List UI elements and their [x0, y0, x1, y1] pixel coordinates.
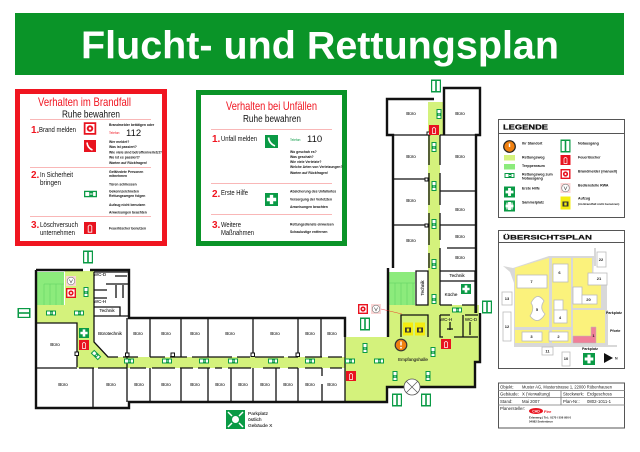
step 2: Türen schliessen	[109, 182, 137, 186]
step 3: Weitere	[221, 222, 241, 229]
legend entries left: Ihr Standort	[522, 142, 543, 146]
room labels: Büro	[225, 331, 235, 336]
room labels: Büro	[455, 111, 465, 116]
planner logo	[529, 408, 572, 424]
emergency exit doors	[18, 80, 492, 406]
step 1: Telefon:	[109, 131, 120, 135]
legend entries left: Treppenraum	[522, 164, 545, 168]
site map: 7	[530, 279, 533, 284]
room labels: Büro	[455, 207, 465, 212]
legend entries left: Erste Hilfe	[522, 186, 540, 190]
step 1: Brandmelder betätigen oder	[109, 123, 155, 127]
site map: Parkplatz	[606, 311, 622, 315]
title block: Muster AG, Musterstrasse 1, 22000 Rübenhausen	[522, 384, 613, 390]
step 2: mitnehmen	[109, 174, 127, 178]
legend entries right: Brandmelder (manuell)	[578, 170, 618, 174]
legend entries left	[504, 141, 553, 212]
site map: 5	[536, 307, 539, 312]
room labels: Büro	[327, 331, 337, 336]
site map: 12	[505, 324, 510, 329]
room labels	[50, 111, 478, 387]
room labels: Büro	[215, 382, 225, 387]
title block: Plan-Nr.:	[563, 399, 580, 404]
step 2: 2.	[212, 189, 221, 200]
step 2	[212, 189, 336, 209]
step 3: Rettungsdienste einweisen	[290, 222, 334, 226]
site map: 4	[559, 315, 562, 320]
legend entries right: Bedienstelle RWA	[578, 184, 609, 188]
step 2: Aufzug nicht benutzen	[109, 203, 145, 207]
assembly point: östlich	[248, 417, 262, 423]
site map: 3	[530, 334, 533, 339]
room labels: Büro	[190, 382, 200, 387]
title block: Mai 2007	[522, 399, 540, 404]
assembly point	[226, 410, 273, 429]
step 3: unternehmen	[40, 230, 75, 237]
step 3	[212, 220, 334, 237]
room labels: Büro	[283, 382, 293, 387]
icon: revolving door	[404, 379, 420, 395]
step 2: Anweisungen beachten	[109, 210, 147, 214]
floor plan	[18, 80, 492, 429]
room labels: Büro	[406, 198, 416, 203]
legend entries left: Rettungsweg	[522, 156, 545, 160]
step 1: Wie viele Verletzte?	[290, 160, 321, 164]
overview heading: ÜBERSICHTSPLAN	[503, 232, 592, 242]
legend heading: LEGENDE	[503, 124, 548, 132]
step 2: Versorgung der Verletzten	[290, 198, 332, 202]
site map: 21	[597, 276, 602, 281]
step 1: Warten auf Rückfragen!	[109, 161, 147, 165]
heading: Unfälle: Verhalten bei Unfällen	[226, 99, 317, 113]
room labels: Büro	[406, 111, 416, 116]
room labels: Büro	[327, 382, 337, 387]
room labels: Büro	[305, 382, 315, 387]
room labels: Büro	[133, 331, 143, 336]
step 3: Maßnahmen	[221, 230, 254, 237]
legend entries right: Feuerlöscher	[578, 156, 601, 160]
room labels: WC-H	[94, 299, 106, 304]
room labels: Büro	[455, 154, 465, 159]
subheading: Ruhe bewahren	[62, 110, 120, 120]
step 2	[31, 170, 147, 214]
escape route and stair fills	[37, 102, 479, 402]
step 3: Schaulustige entfernen	[290, 230, 328, 234]
room labels: Technik	[99, 308, 115, 313]
planner logo: Fire	[544, 409, 552, 414]
assembly point: Gebäude X	[248, 423, 273, 429]
room labels: Büro	[161, 331, 171, 336]
legend entries right: (im Brandfall nicht benutzen)	[578, 202, 619, 206]
site map: Parkplatz	[582, 347, 598, 351]
planner logo: 54082 Seelenbrun	[529, 420, 553, 424]
wall columns	[75, 132, 430, 356]
room labels: Technik	[449, 273, 465, 278]
assembly point: Parkplatz	[248, 411, 269, 417]
panel: Verhalten im Brandfall	[18, 92, 164, 244]
step 1: Warten auf Rückfragen!	[290, 171, 328, 175]
step 2: In Sicherheit	[40, 172, 73, 179]
title block	[498, 383, 625, 428]
step 1: 110	[307, 134, 322, 145]
planner logo: CAD	[532, 410, 540, 414]
step 1: Wo geschah es?	[290, 150, 317, 154]
room labels: Bürotechnik	[98, 331, 123, 336]
site map: 6	[558, 270, 561, 275]
title block: X (Verwaltung)	[522, 392, 551, 396]
room labels: Büro	[134, 382, 144, 387]
site map: 22	[599, 257, 604, 262]
title block: 0802-1011-1	[587, 399, 612, 404]
room labels: Büro	[238, 382, 248, 387]
legend entries left: Sammelplatz	[522, 200, 544, 204]
step 1: 1.	[31, 125, 40, 136]
title block: Planersteller:	[500, 406, 525, 411]
step 2: Gekennzeichneten	[109, 190, 139, 194]
site map: 20	[586, 297, 591, 302]
legend entries right: Notausgang	[578, 142, 599, 146]
step 3	[31, 220, 146, 237]
title banner: Flucht- und Rettungsplan	[81, 24, 559, 68]
step 1: Wie viele sind betroffen/verletzt?	[109, 150, 162, 154]
room labels: Küche	[445, 292, 458, 297]
subheading: Ruhe bewahren	[243, 114, 301, 125]
step 2: 2.	[31, 170, 40, 181]
site map: N	[615, 356, 618, 360]
room labels: Büro	[406, 238, 416, 243]
site map: 2	[557, 334, 560, 339]
step 3: Feuerlöscher benutzen	[109, 226, 146, 230]
outer walls	[36, 88, 480, 408]
room labels: Büro	[260, 382, 270, 387]
heading: Brandfall: Verhalten im Brandfall	[38, 95, 131, 109]
title block: Objekt:	[500, 384, 514, 390]
room labels: Büro	[161, 382, 171, 387]
step 1: Was ist passiert?	[109, 145, 137, 149]
site map: 10	[564, 356, 569, 361]
title block: Gebäude:	[500, 392, 519, 396]
room labels: Büro	[190, 331, 200, 336]
step 2: Anweisungen beachten	[290, 205, 328, 209]
panel: Übersichtsplan	[498, 230, 625, 368]
room labels: Büro	[270, 331, 280, 336]
panel: Verhalten bei Unfällen	[198, 92, 344, 244]
room labels: Büro	[455, 255, 465, 260]
step 3: 3.	[212, 220, 221, 231]
step 2: Rettungswegen folgen	[109, 194, 145, 198]
legend entries right: Aufzug	[578, 196, 590, 200]
planner logo: Erlenweg | Tel.: 0170 / 556 950 0	[529, 416, 572, 420]
site map: 13	[505, 296, 510, 301]
step 2: bringen	[40, 180, 61, 187]
room labels: Technik	[420, 280, 425, 296]
panel: Legende	[498, 120, 625, 218]
room labels: Büro	[305, 331, 315, 336]
room labels: Büro	[106, 382, 116, 387]
legend entries left: Rettungsweg zum	[522, 172, 553, 176]
title block: Stand:	[500, 399, 512, 404]
room labels: Büro	[455, 234, 465, 239]
step 1: Telefon:	[290, 138, 301, 142]
step 1	[212, 134, 343, 175]
room labels: Büro	[50, 342, 60, 347]
room labels: WC-D	[465, 317, 478, 322]
room labels: Büro	[58, 382, 68, 387]
title block: Erdgeschoss	[587, 392, 612, 396]
site map: 1	[592, 333, 595, 338]
site map	[502, 248, 622, 366]
site map: Pforte	[610, 329, 620, 333]
site map: 11	[545, 348, 550, 354]
icon: you are here	[395, 339, 407, 351]
step 1: Welche Arten von Verletzungen?	[290, 165, 343, 169]
room labels: WC-H	[440, 317, 452, 322]
step 1: 112	[126, 128, 141, 139]
title banner	[15, 13, 624, 75]
step 1: Brand melden	[39, 127, 76, 134]
step 1: Wer meldet?	[109, 140, 129, 144]
legend entries right	[560, 140, 619, 210]
room labels: Empfangshalle	[398, 357, 428, 362]
step 1: 1.	[212, 134, 221, 145]
room labels: Büro	[406, 154, 416, 159]
step 3: Löschversuch	[40, 222, 78, 229]
step 2: Gefährdete Personen	[109, 170, 143, 174]
title block: Stockwerk:	[563, 392, 584, 396]
safety icons	[66, 125, 471, 395]
room labels: WC-D	[94, 272, 107, 277]
step 3: 3.	[31, 220, 40, 231]
legend entries left: Notausgang	[522, 176, 543, 180]
step 1	[31, 122, 162, 165]
step 1: Unfall melden	[221, 136, 257, 143]
step 2: Absicherung des Unfallortes	[290, 190, 336, 194]
interior walls	[37, 135, 478, 408]
step 1: Was geschah?	[290, 155, 314, 159]
step 2: Erste Hilfe	[221, 190, 248, 197]
step 1: Wo ist es passiert?	[109, 156, 140, 160]
exit signs	[46, 109, 462, 381]
